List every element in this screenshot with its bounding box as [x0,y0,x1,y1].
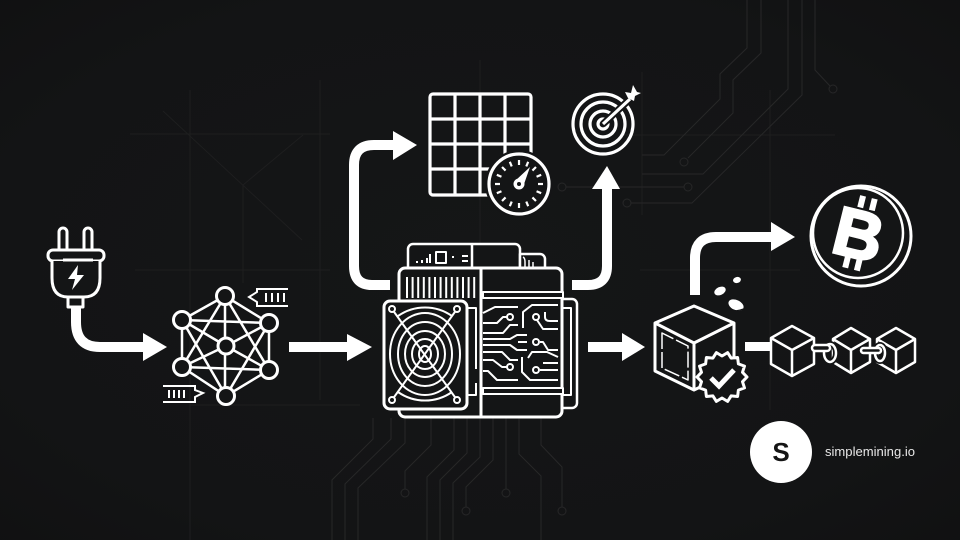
arrow: network to miner [289,334,372,361]
circuit traces: top right [558,0,837,207]
circuit traces: bottom centre [332,418,566,540]
miner main chassis [399,268,563,417]
icon: gauge [485,150,553,218]
logo: simplemining.io: simplemining.io [825,444,915,459]
arrow: miner to block [588,333,645,361]
miner top housing [408,244,545,268]
miner side panel [550,299,577,408]
logo: simplemining.io [750,421,915,483]
icon: ASIC miner [384,244,577,417]
miner vents [407,277,474,298]
miner inner rails [467,308,476,395]
icon: power plug [48,228,104,307]
icon: bitcoin coin [811,186,911,286]
icon: bitcoin coin: B [825,192,892,278]
icon: outbound data tag [163,386,203,402]
icon: verified badge [697,353,747,401]
arrow: miner to target [572,166,620,285]
icon: difficulty grid [430,94,531,195]
icon: node network [174,288,278,404]
icon: target with arrow [573,85,641,154]
icon: blockchain [771,326,915,376]
connector: block to chain [745,342,771,351]
logo: simplemining.io: S [772,437,790,467]
miner fan housing [384,301,467,409]
arrow: plug to network [76,307,167,361]
icon: inbound data tag [249,289,288,306]
arrow: block to bitcoin [695,222,795,295]
arrow: miner to difficulty grid [354,131,417,285]
miner fan guard [389,306,460,403]
icon: mined block [655,306,734,390]
miner circuit board [483,305,558,380]
icon: reward coins [713,276,745,313]
